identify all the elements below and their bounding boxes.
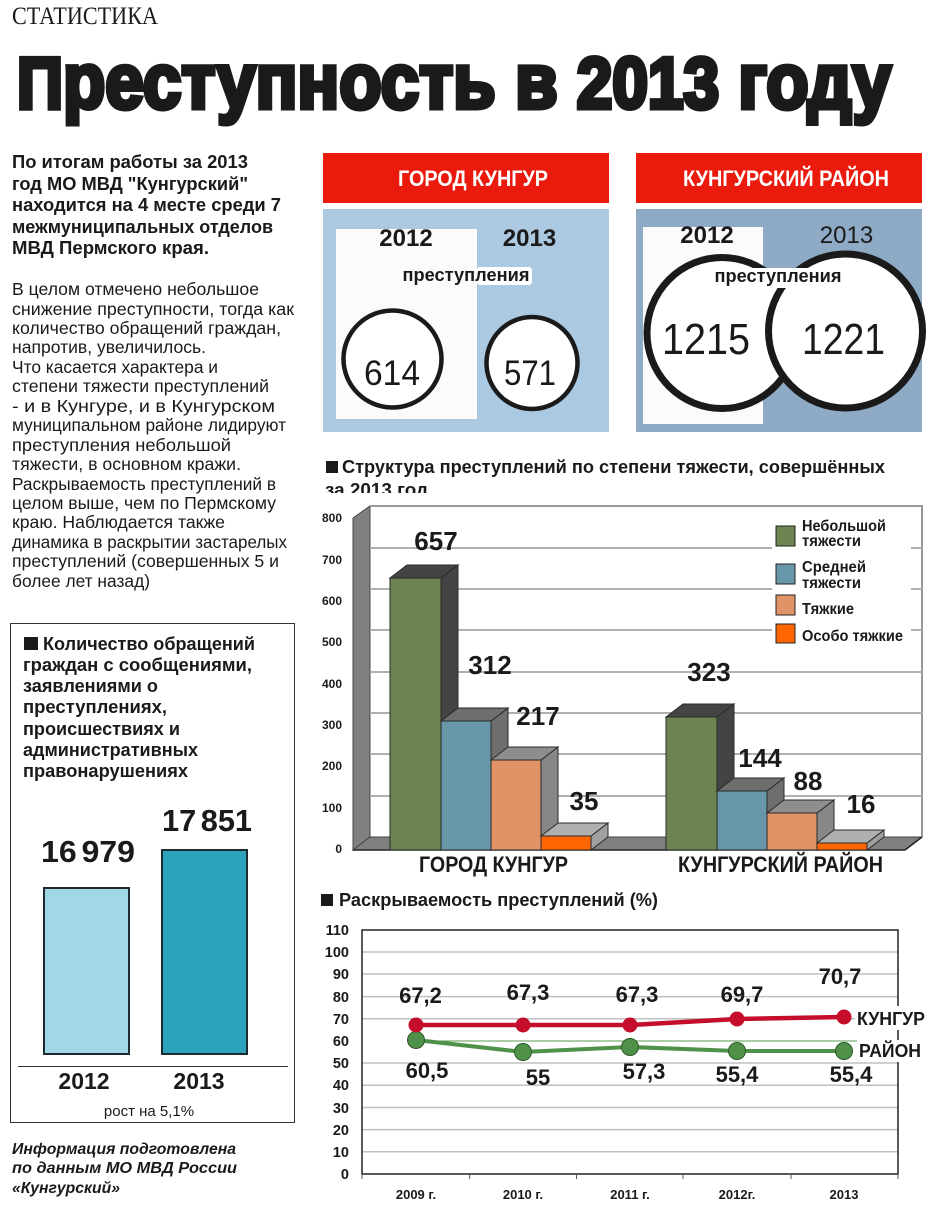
appeals heading: заявлениями о [23,675,158,696]
y axis labels: 200 [322,759,342,773]
circle 1221: 1221 [802,315,885,364]
city values [399,964,861,1008]
intro text: body: более лет назад) [12,571,150,591]
district values: 55,4 [716,1062,759,1087]
panel: city header: ГОРОД КУНГУР [398,166,548,191]
intro text: body: динамика в раскрытии застарелых [12,532,287,552]
x axis labels: 2012г. [719,1187,755,1202]
panel: citizen appeals [10,624,294,1122]
category labels: ГОРОД КУНГУР [419,852,568,877]
legend: тяжести [802,533,861,550]
value labels: 88 [794,766,822,796]
year 2013: 2013 [503,225,556,252]
source note: «Кунгурский» [12,1180,120,1197]
value labels [414,526,875,819]
series labels [855,1006,927,1062]
value labels: 657 [414,526,458,556]
circle 614 [344,310,442,408]
intro text: body: степени тяжести преступлений [12,376,269,396]
year 2012: 2012 [379,225,433,252]
value labels: 35 [570,786,598,816]
heading: crime structure [325,456,886,500]
appeals heading: правонарушениях [23,760,189,781]
panel: city crimes [323,209,609,432]
intro text: body: тяжести, в основном кражи. [12,454,241,474]
crimes caption: преступления [714,265,842,286]
x axis labels [396,1187,858,1202]
bar 2013: 17 851 [162,803,252,838]
appeals heading: Количество обращений [43,633,255,654]
panel: district header: КУНГУРСКИЙ РАЙОН [683,166,889,191]
panel: district header [636,153,922,203]
panel: district crimes [636,209,922,432]
appeals heading: административных [23,739,199,760]
bar 2013 [162,803,252,1094]
title: Преступность в 2013 году [17,37,891,125]
y axis labels: 10 [333,1145,349,1161]
intro text: bold lead: год МО МВД "Кунгурский" [12,174,248,194]
district values: 55 [526,1065,550,1090]
heading: clearance rate: Раскрываемость преступлений (%) [339,889,658,910]
bars: city [390,565,608,850]
y axis labels: 50 [333,1056,349,1072]
city values: 67,3 [507,980,549,1005]
intro text: body [12,279,294,591]
circle 1215: 1215 [662,315,750,364]
y axis labels: 70 [333,1012,349,1028]
intro text: body: Раскрываемость преступлений в [12,474,276,494]
value labels: 323 [687,657,731,687]
intro text: bold lead: находится на 4 месте среди 7 [12,195,281,215]
series: district [408,1032,852,1060]
year 2012: 2012 [680,222,734,249]
y axis labels: 0 [335,842,342,856]
intro text: body: целом выше, чем по Пермскому [12,493,276,513]
heading: crime structure: Структура преступлений по степени тяжести, совершённых [342,456,886,477]
city values: 67,2 [399,983,442,1008]
intro text: body: преступлений (совершенных 5 и [12,551,279,571]
intro text: body: краю. Наблюдается также [12,512,225,532]
y axis labels: 800 [322,511,342,525]
appeals heading: происшествиях и [23,718,180,739]
intro text: body: преступления небольшой [12,435,231,455]
series labels: КУНГУР [857,1008,925,1029]
year 2013: 2013 [820,222,873,249]
y axis labels: 700 [322,553,342,567]
panel: city header [323,153,609,203]
intro text: body: В целом отмечено небольшое [12,279,259,299]
bar chart: crime structure [312,493,937,880]
y axis labels: 60 [333,1034,349,1050]
city values: 70,7 [819,964,861,989]
x axis labels: 2011 г. [610,1187,650,1202]
category labels [419,852,883,877]
intro text: body: количество обращений граждан, [12,318,281,338]
y axis labels [325,923,349,1183]
district values: 55,4 [830,1062,873,1087]
intro text: body: снижение преступности, тогда как [12,299,294,319]
y axis labels: 300 [322,718,342,732]
circle 1215 [647,258,797,408]
legend: тяжести [802,575,861,592]
circle 571 [486,317,578,409]
y axis labels: 600 [322,594,342,608]
value labels: 16 [847,789,875,819]
intro text: body: муниципальном районе лидируют [12,415,286,435]
y axis labels: 40 [333,1078,349,1094]
appeals heading [23,633,255,781]
x axis labels: 2010 г. [503,1187,543,1202]
source note [12,1141,237,1197]
y axis labels: 30 [333,1101,349,1117]
circle 571: 571 [504,354,556,393]
circle 614: 614 [364,354,420,393]
x axis labels: 2009 г. [396,1187,436,1202]
category labels: КУНГУРСКИЙ РАЙОН [678,852,883,877]
y axis labels: 110 [326,923,349,939]
intro text: bold lead: МВД Пермского края. [12,238,209,258]
source note: Информация подготовлена [12,1141,236,1158]
intro text: body: - и в Кунгуре, и в Кунгурском [12,396,275,416]
legend: Небольшой [802,518,886,535]
y axis labels: 400 [322,677,342,691]
value labels: 312 [468,650,512,680]
line chart: clearance rate [325,923,927,1202]
value labels: 217 [516,701,560,731]
y axis labels: 100 [322,801,342,815]
bar 2012: 16 979 [41,834,135,869]
crimes caption: преступления [402,264,530,285]
appeals heading: преступлениях, [23,696,167,717]
appeals heading: граждан с сообщениями, [23,654,252,675]
bars: district [666,704,884,850]
intro text: bold lead: По итогам работы за 2013 [12,152,248,172]
series labels: РАЙОН [859,1040,921,1061]
y axis labels: 100 [325,945,349,961]
series: city [408,1010,852,1032]
intro text: bold lead [12,152,281,258]
legend: Средней [802,559,866,576]
y axis labels: 0 [341,1167,349,1183]
intro text: body: напротив, увеличилось. [12,337,206,357]
city values: 67,3 [616,982,658,1007]
y axis labels: 90 [333,967,349,983]
y axis labels: 500 [322,635,342,649]
section label: СТАТИСТИКА [12,3,158,30]
intro text: bold lead: межмуниципальных отделов [12,217,273,237]
y axis labels [322,511,342,856]
city values: 69,7 [721,982,763,1007]
source note: по данным МО МВД России [12,1160,237,1177]
bar 2013: 2013 [173,1068,225,1094]
district values [406,1058,873,1090]
legend: Тяжкие [802,601,854,618]
y axis labels: 80 [333,990,349,1006]
heading: crime structure: за 2013 год [325,479,428,500]
district values: 60,5 [406,1058,448,1083]
bar 2012: 2012 [58,1068,110,1094]
bar 2012 [41,834,135,1094]
legend [772,512,911,648]
growth note: рост на 5,1% [104,1103,194,1120]
y axis labels: 20 [333,1123,349,1139]
x axis labels: 2013 [830,1187,858,1202]
district values: 57,3 [623,1059,665,1084]
legend: Особо тяжкие [802,628,903,645]
value labels: 144 [738,743,782,773]
circle 1221 [768,254,922,408]
intro text: body: Что касается характера и [12,357,218,377]
